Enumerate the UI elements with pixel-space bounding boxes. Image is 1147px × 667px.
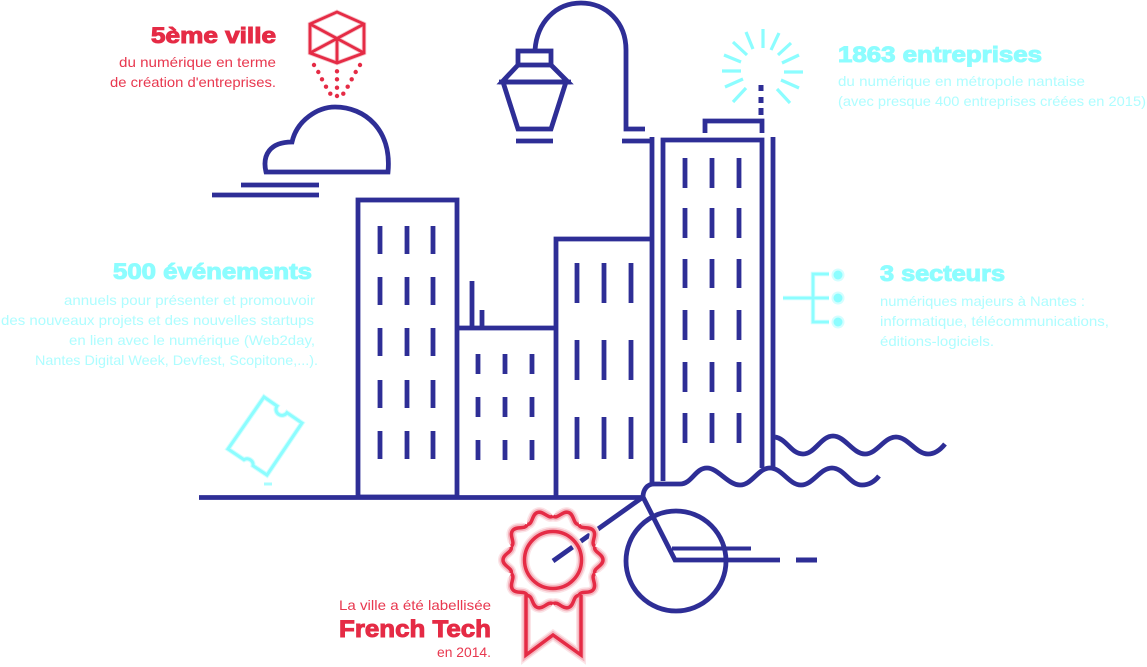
icon: light rays [722, 29, 803, 103]
text block: 1863 entreprises [838, 42, 1146, 109]
text block: 500 événements [1, 259, 318, 368]
building 2 [457, 281, 556, 460]
street lamp [499, 3, 645, 141]
text block: 500 événements: annuels pour présenter et promouvoir [64, 292, 315, 308]
text block: 3 secteurs [880, 261, 1109, 349]
text block: 3 secteurs: 3 secteurs [880, 261, 1005, 286]
text block: 500 événements: des nouveaux projets et des nouvelles startups [1, 312, 314, 328]
icon: ticket [228, 397, 302, 484]
building 1 [358, 200, 457, 497]
water waves [654, 436, 945, 485]
icon: cube with dots [310, 12, 364, 98]
building 3 [556, 239, 652, 497]
text block: 3 secteurs: numériques majeurs à Nantes : [880, 293, 1085, 309]
cloud with lines [212, 107, 388, 195]
text block: 5ème ville: du numérique en terme [119, 54, 276, 70]
icon: rosette badge [503, 508, 603, 655]
text block: 5ème ville [110, 23, 276, 90]
text block: 3 secteurs: éditions-logiciels. [880, 333, 994, 349]
text block: 1863 entreprises: du numérique en métropole nantaise [838, 73, 1085, 89]
text block: 1863 entreprises: 1863 entreprises [838, 42, 1042, 67]
bicycle [553, 484, 817, 611]
text block: 1863 entreprises: (avec presque 400 entreprises créées en 2015) [838, 93, 1146, 109]
ground line [199, 495, 643, 500]
icon: sector tree [783, 268, 844, 328]
text block: 500 événements: en lien avec le numérique (Web2day, [69, 332, 315, 348]
text block: 5ème ville: de création d'entreprises. [110, 74, 276, 90]
text block: French Tech: La ville a été labellisée [339, 597, 491, 613]
building 4 tower [622, 85, 773, 484]
text block: French Tech [339, 597, 491, 660]
text block: 500 événements: Nantes Digital Week, Devfest, Scopitone,...). [35, 352, 318, 368]
text block: French Tech: en 2014. [437, 644, 491, 660]
text block: 3 secteurs: informatique, télécommunications, [880, 313, 1109, 329]
text block: French Tech: French Tech [339, 616, 491, 643]
text block: 5ème ville: 5ème ville [151, 23, 276, 48]
text block: 500 événements: 500 événements [113, 259, 312, 284]
